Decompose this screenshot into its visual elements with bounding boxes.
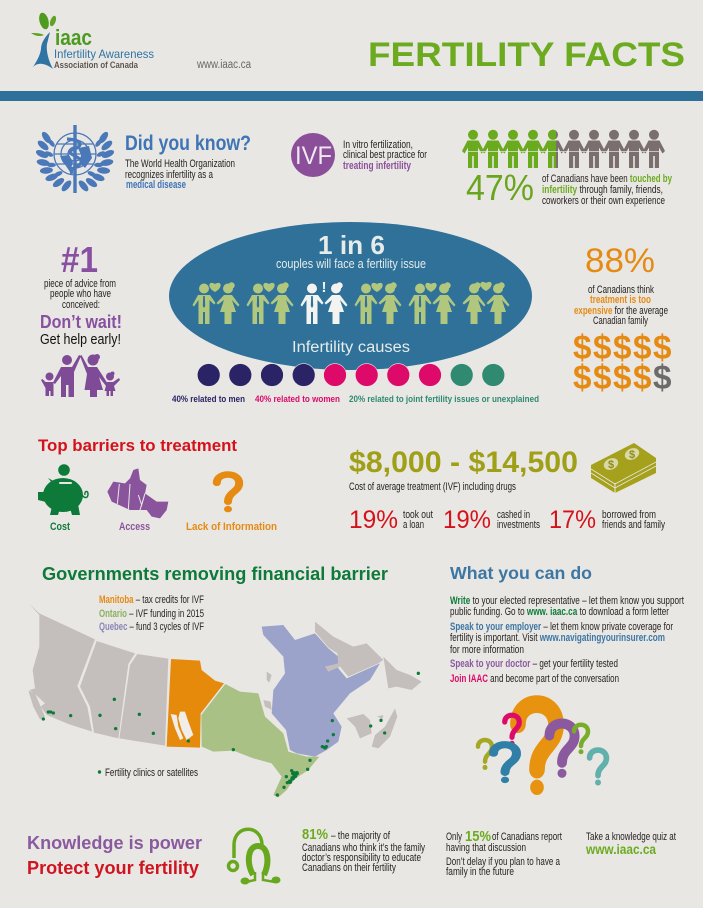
couples pictogram [192, 279, 510, 324]
icon: WHO emblem [35, 125, 115, 193]
15 percent text block: 15% [465, 829, 491, 845]
province: Nova Scotia [372, 708, 397, 748]
stat: took out a loan: took out [403, 509, 433, 521]
81 percent text block [302, 827, 425, 874]
province: Saskatchewan [119, 654, 168, 746]
title: FERTILITY FACTS [368, 36, 685, 74]
dont wait: Don’t wait! [40, 312, 122, 332]
province: Ontario [201, 684, 319, 797]
88 percent text: of Canadians think [588, 284, 654, 296]
website link: www.iaac.ca [196, 59, 252, 71]
province: Quebec [262, 625, 380, 757]
advice text: people who have [50, 288, 111, 300]
88 percent text: expensive for the average [574, 305, 668, 317]
dollar signs pictogram: $ [653, 359, 672, 397]
icon: IVF circle [291, 133, 335, 177]
stat: borrowed: 17% [549, 506, 596, 534]
15 percent text block: of Canadians report [492, 831, 562, 843]
stat: took out a loan: 19% [349, 506, 398, 534]
81 percent text block: Canadians who think it’s the family [302, 842, 425, 854]
advice text [44, 278, 116, 311]
stat: cashed in investments: investments [497, 519, 540, 531]
15 percent text block: Don’t delay if you plan to have a [446, 856, 561, 868]
province: Newfoundland [383, 657, 422, 690]
protect heading: Protect your fertility [27, 858, 199, 878]
actions list: Speak to your doctor – get your fertility tested [450, 658, 618, 670]
infertility causes legend [172, 394, 539, 404]
icon: orange question mark [217, 474, 239, 512]
dollar signs pictogram: $ [593, 329, 612, 367]
stat: took out a loan: a loan [403, 519, 424, 531]
88 percent text: Canadian family [593, 315, 648, 327]
icon: IVF circle: IVF [295, 142, 332, 170]
47 percent stat: 47% [466, 167, 534, 208]
actions list: public funding. Go to www. iaac.ca to download a form letter [450, 606, 669, 618]
provincial funding list [99, 594, 204, 633]
stat: took out a loan [349, 506, 433, 534]
icon: money stack: $ [629, 449, 635, 461]
stat: borrowed: friends and family [602, 519, 665, 531]
dollar signs pictogram: $ [613, 359, 632, 397]
stat: cashed in investments: 19% [443, 506, 491, 534]
IVF text block: clinical best practice for [343, 149, 427, 161]
dollar signs pictogram: $ [653, 329, 672, 367]
clinic markers [42, 672, 420, 797]
infertility causes dots [197, 364, 505, 386]
IVF text block: treating infertility [343, 160, 412, 172]
47 percent stat [466, 167, 673, 208]
infertility causes legend: 40% related to women [255, 394, 340, 404]
actions list: for more information [450, 644, 524, 656]
infertility causes legend: 40% related to men [172, 394, 245, 404]
did you know text block [125, 132, 251, 191]
actions list: Join IAAC and become part of the conversation [450, 673, 619, 685]
label: cost: Cost [50, 521, 70, 533]
province: New Brunswick [347, 714, 372, 738]
map of Canada [28, 604, 422, 797]
panel: number one advice [40, 239, 122, 397]
pictogram: 47 percent of people [462, 130, 665, 168]
15 percent text block: having that discussion [446, 842, 526, 854]
did you know text block: medical disease [126, 179, 186, 191]
couples pictogram: ! [322, 279, 326, 296]
label: lack of information: Lack of Information [186, 521, 277, 533]
advice text: conceived: [62, 299, 100, 311]
logo: IAAC [31, 12, 154, 71]
province: British Columbia [29, 604, 95, 732]
provincial funding list: Quebec – fund 3 cycles of IVF [99, 621, 204, 633]
47 percent stat: infertility through family, friends, [542, 184, 663, 196]
81 percent text block: Canadians on their fertility [302, 862, 396, 874]
icon: stethoscope [228, 829, 280, 884]
dollar signs pictogram: $ [633, 359, 652, 397]
logo: IAAC: Infertility Awareness [54, 47, 154, 61]
logo: IAAC: Association of Canada [54, 60, 139, 71]
IVF text block: In vitro fertilization, [343, 139, 413, 151]
47 percent stat: of Canadians have been touched by [542, 173, 673, 185]
heading: governments: Governments removing financial barrier [42, 564, 388, 584]
knowledge heading: Knowledge is power [27, 833, 202, 853]
provincial funding list: Ontario – IVF funding in 2015 [99, 608, 204, 620]
quiz callout: www.iaac.ca [585, 841, 656, 857]
did you know text block: recognizes infertility as a [125, 169, 214, 181]
88 percent text: treatment is too [590, 294, 651, 306]
icon: piggy bank [38, 464, 88, 515]
icon: question marks cluster [478, 704, 606, 795]
cost range caption: Cost of average treatment (IVF) including drugs [349, 481, 516, 493]
label: access: Access [119, 521, 150, 533]
heading: top barriers: Top barriers to treatment [38, 436, 237, 455]
stat: borrowed: borrowed from [602, 509, 656, 521]
81 percent text block: – the majority of [331, 830, 391, 842]
small islands [263, 672, 383, 719]
dollar signs pictogram [573, 329, 672, 397]
IVF text block [343, 139, 427, 172]
stat: cashed in investments [443, 506, 540, 534]
81 percent text block: 81% [302, 827, 328, 843]
advice text: piece of advice from [44, 278, 116, 290]
heading: what you can do: What you can do [450, 563, 592, 583]
get help early: Get help early! [40, 331, 121, 348]
quiz callout [585, 831, 676, 857]
logo: IAAC: iaac [55, 25, 92, 50]
15 percent text block [446, 829, 562, 878]
dollar signs pictogram: $ [593, 359, 612, 397]
did you know text block: Did you know? [125, 132, 251, 155]
icon: money stack [591, 443, 656, 493]
Manitoba lakes [171, 712, 193, 740]
dollar signs pictogram: $ [573, 359, 592, 397]
cost range heading: $8,000 - $14,500 [349, 446, 578, 479]
heading: 1 in 6: 1 in 6 [318, 230, 385, 260]
map legend [98, 767, 198, 779]
actions list [450, 595, 684, 685]
stat: borrowed [549, 506, 665, 534]
number one: #1 [61, 239, 98, 280]
icon: Canada map [107, 468, 168, 518]
did you know text block: The World Health Organization [125, 158, 235, 170]
provincial funding list: Manitoba – tax credits for IVF [99, 594, 204, 606]
subheading: couples: couples will face a fertility issue [276, 257, 426, 271]
panel: 1 in 6 ellipse [169, 222, 532, 370]
province: Alberta [80, 641, 135, 738]
81 percent text block: doctor’s responsibility to educate [302, 852, 421, 864]
88 percent stat: 88% [585, 242, 655, 280]
dollar signs pictogram: $ [613, 329, 632, 367]
infertility causes legend: 20% related to joint fertility issues or unexplained [349, 394, 539, 404]
province: Labrador [315, 622, 383, 677]
actions list: fertility is important. Visit www.navigatingyourinsurer.com [450, 632, 665, 644]
province: Manitoba [167, 659, 224, 748]
heading: infertility causes: Infertility causes [292, 339, 410, 356]
88 percent text [574, 284, 668, 327]
15 percent text block: family in the future [446, 866, 514, 878]
dollar signs pictogram: $ [573, 329, 592, 367]
map legend: Fertility clinics or satellites [105, 767, 198, 779]
icon: money stack: $ [608, 459, 614, 471]
stat: cashed in investments: cashed in [497, 509, 530, 521]
province: Vancouver Island [28, 691, 45, 719]
header band [0, 91, 703, 101]
icon: family [41, 354, 120, 397]
dollar signs pictogram: $ [633, 329, 652, 367]
15 percent text block: Only [446, 831, 462, 843]
panel: 88 percent [573, 242, 672, 397]
